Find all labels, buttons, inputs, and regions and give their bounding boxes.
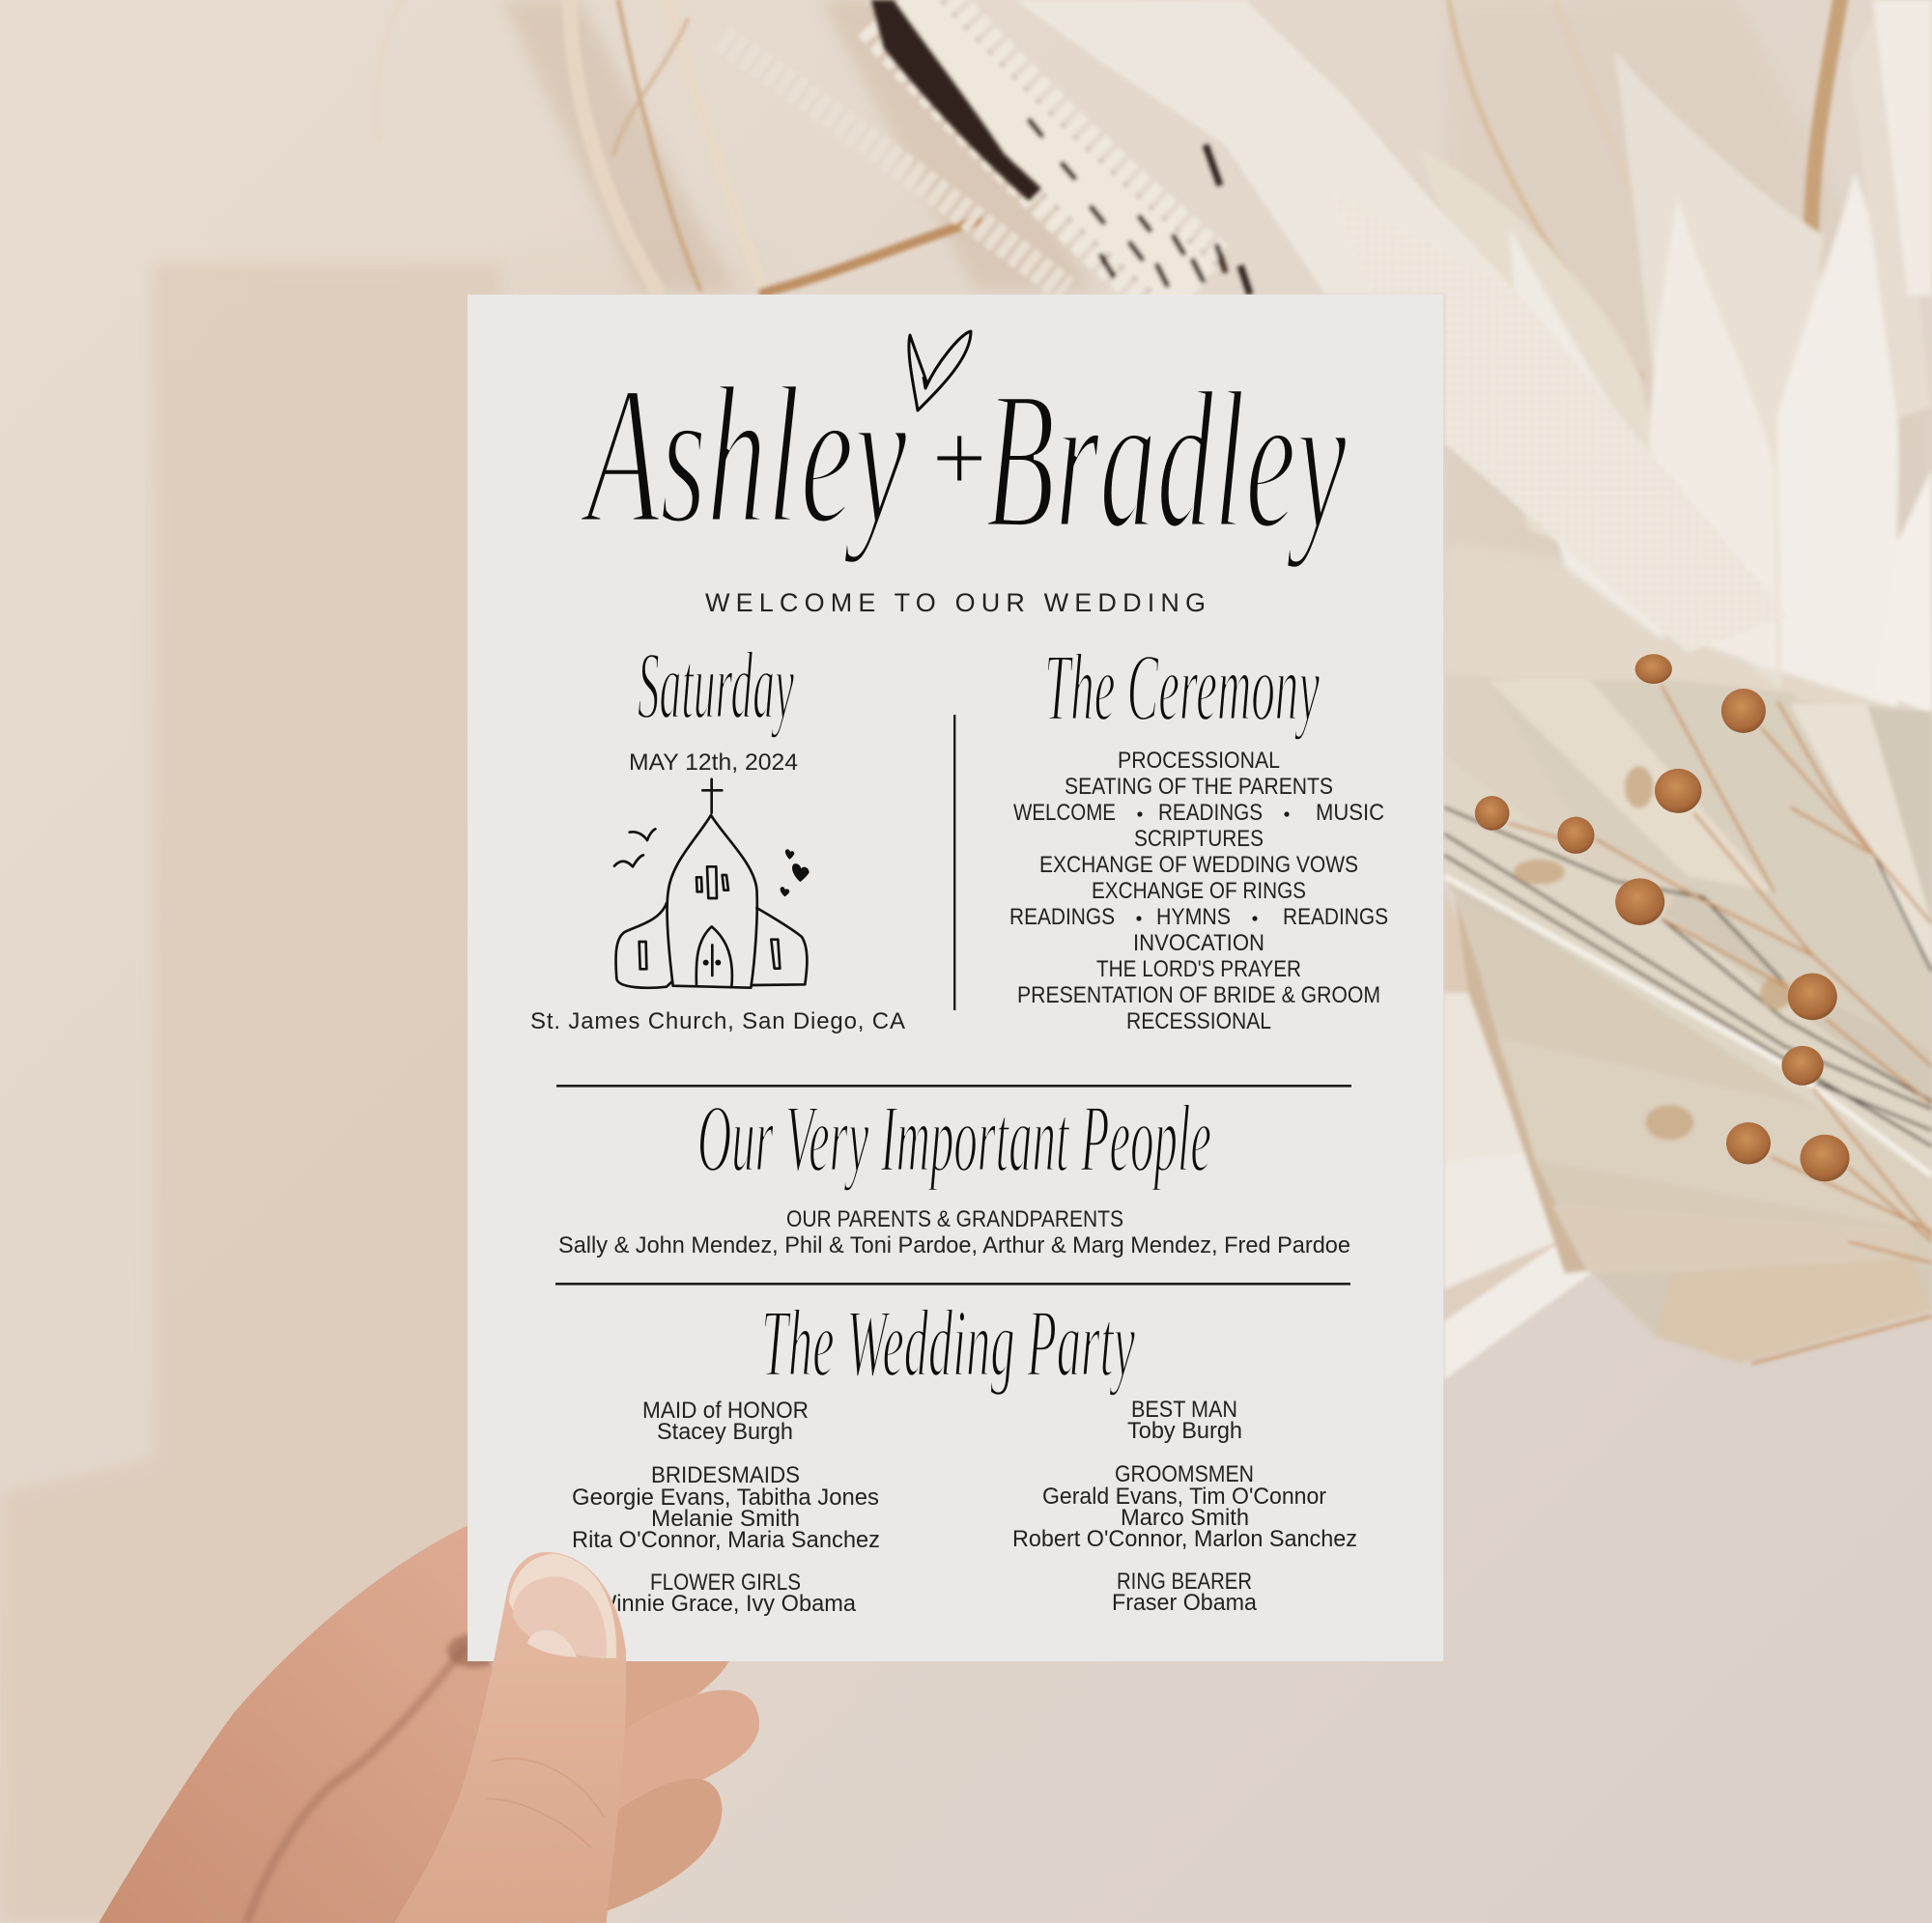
pale fronds under fan [1444, 892, 1591, 1379]
venue: St. James Church, San Diego, CA [530, 1008, 905, 1034]
dark stem [871, 0, 1041, 201]
lower blades [1456, 897, 1932, 1274]
divider above VIPs [556, 1085, 1351, 1088]
title: couple names: Bradley [985, 351, 1348, 570]
bride's side: Melanie Smith [651, 1506, 800, 1532]
flax seed heads [1475, 654, 1850, 1181]
heart doodle [909, 331, 971, 410]
ceremony order list: PROCESSIONAL [1118, 748, 1280, 774]
ceremony order list: SCRIPTURES [1134, 826, 1264, 852]
seed shadow blotches [1514, 766, 1792, 1140]
divider above wedding party [555, 1283, 1350, 1286]
bride's side: BRIDESMAIDS [651, 1462, 800, 1488]
groom's side: Toby Burgh [1127, 1418, 1242, 1444]
upper blades [1444, 675, 1688, 919]
bride's side: Georgie Evans, Tabitha Jones [572, 1485, 879, 1511]
date: MAY 12th, 2024 [629, 749, 798, 776]
ceremony order list: RECESSIONAL [1126, 1008, 1271, 1034]
bride's side: Stacey Burgh [657, 1419, 793, 1445]
knuckle creases [487, 1759, 604, 1848]
heading: The Wedding Party: The Wedding Party [761, 1289, 1135, 1397]
bride's side: MAID of HONOR [642, 1398, 809, 1424]
parents and grandparents: OUR PARENTS & GRANDPARENTS [786, 1206, 1123, 1232]
hand: back fingers [99, 1525, 759, 1923]
ceremony order list: HYMNS [1156, 904, 1231, 930]
stacked blade edges [1444, 754, 1932, 1178]
groom's side: Fraser Obama [1112, 1590, 1258, 1616]
ceremony order list: MUSIC [1316, 800, 1384, 826]
program card: The Ceremony [1044, 634, 1320, 741]
ceremony order list [1009, 748, 1388, 1034]
ceremony order list: READINGS [1009, 904, 1115, 930]
ceremony order list: WELCOME [1013, 800, 1116, 826]
groom's side: RING BEARER [1117, 1569, 1252, 1595]
ceremony order list: READINGS [1158, 800, 1263, 826]
ceremony order list: EXCHANGE OF WEDDING VOWS [1039, 852, 1358, 878]
title: couple names: + [931, 404, 987, 512]
ceremony order list: THE LORD'S PRAYER [1096, 956, 1301, 982]
parents and grandparents [558, 1206, 1350, 1258]
program card: Our Very Important People [697, 1085, 1211, 1192]
ceremony order list: EXCHANGE OF RINGS [1092, 878, 1306, 904]
icon: hand-drawn church with birds and hearts [614, 779, 809, 988]
subtitle: WELCOME TO OUR WEDDING [705, 588, 1206, 617]
groom's side: Marco Smith [1121, 1505, 1249, 1531]
palm fan [1444, 675, 1932, 1379]
bride's side: FLOWER GIRLS [650, 1570, 801, 1596]
ceremony order list: PRESENTATION OF BRIDE & GROOM [1017, 982, 1380, 1008]
blurred zone behind fan top [1444, 541, 1932, 734]
groom's side: BEST MAN [1131, 1397, 1237, 1423]
bride's side [572, 1398, 880, 1617]
ceremony order list: READINGS [1283, 904, 1388, 930]
fan base [1444, 675, 1932, 1364]
hand: thumb holding card [394, 1552, 626, 1923]
bride's side: Winnie Grace, Ivy Obama [595, 1591, 857, 1617]
groom's side: Robert O'Connor, Marlon Sanchez [1012, 1526, 1357, 1552]
dried plants top [377, 0, 1932, 734]
groom's side [1012, 1397, 1357, 1616]
plant shadows [502, 0, 1932, 676]
bride's side: Rita O'Connor, Maria Sanchez [572, 1527, 880, 1553]
program card [468, 295, 1443, 1661]
parents and grandparents: Sally & John Mendez, Phil & Toni Pardoe, Arthur & Marg Mendez, Fred Pardoe [558, 1232, 1350, 1258]
white palm spears [1417, 0, 1932, 715]
fern fronds [722, 0, 1225, 290]
column divider [953, 715, 955, 1010]
title: couple names: Ashley [580, 346, 908, 565]
thumbnail [509, 1554, 616, 1658]
groom's side: Gerald Evans, Tim O'Connor [1042, 1484, 1326, 1510]
groom's side: GROOMSMEN [1115, 1461, 1254, 1487]
program card: Saturday [638, 632, 794, 739]
ceremony order list: INVOCATION [1133, 930, 1264, 956]
title: couple names [580, 346, 1348, 570]
ceremony order list: SEATING OF THE PARENTS [1065, 774, 1333, 800]
pampas plume [1015, 0, 1787, 653]
white band and dark gaps [1444, 876, 1932, 1175]
dried flax stems [1509, 686, 1932, 1364]
dried grass blades [377, 0, 1840, 377]
